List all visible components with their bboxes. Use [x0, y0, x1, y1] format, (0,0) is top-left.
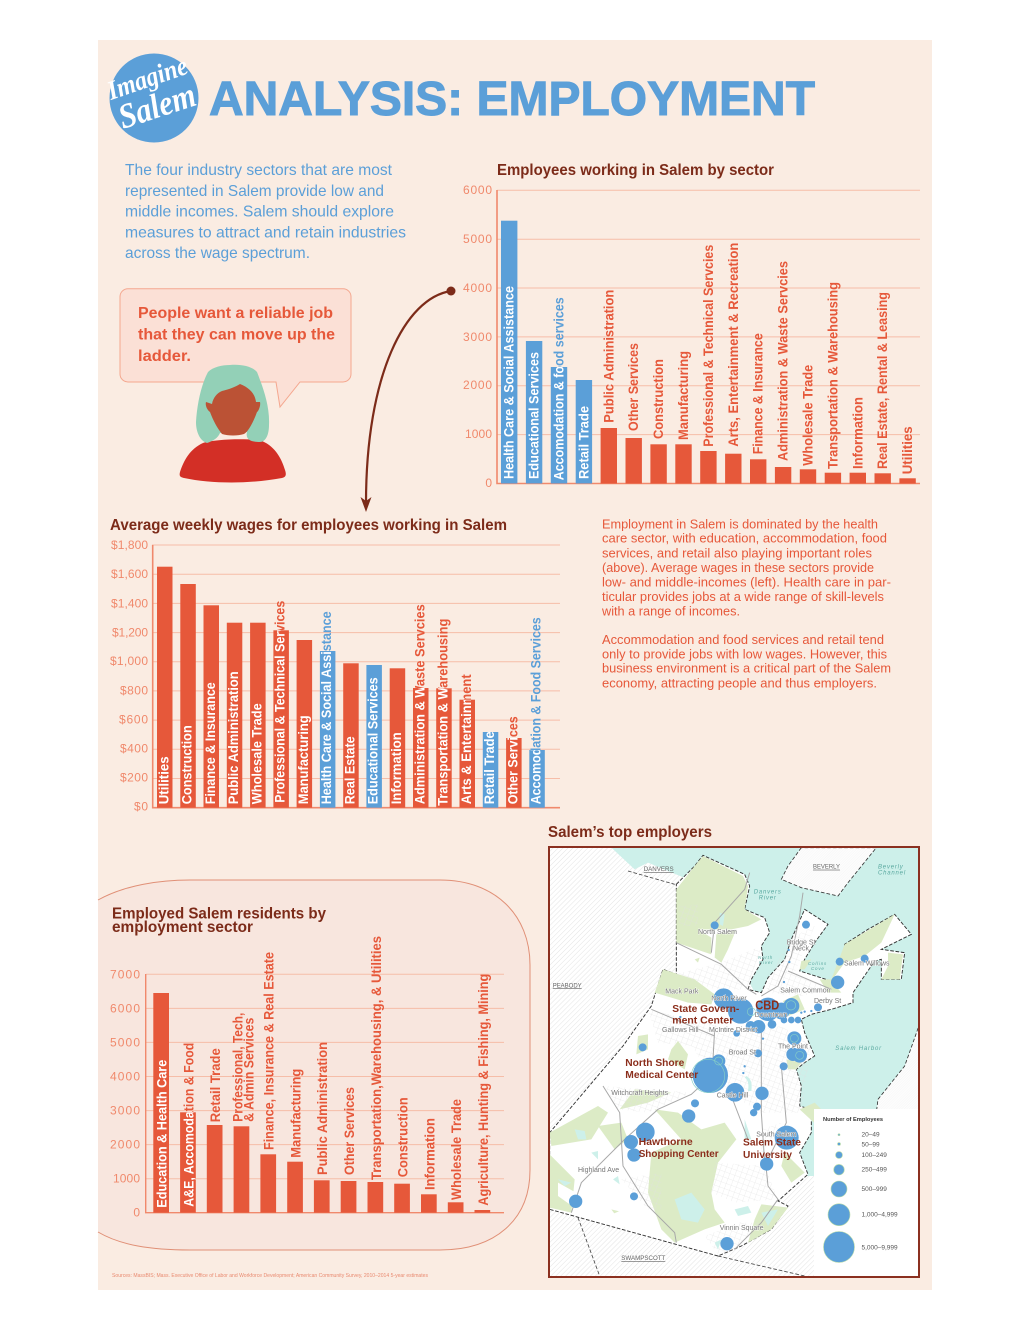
icon: person: [180, 365, 286, 482]
bar chart: employees working in Salem: Finance & Insurance: [751, 333, 766, 454]
bar chart: employees working in Salem: Administration & Waste Servcies: [776, 261, 791, 461]
heading: average weekly wages: Average weekly wages for employees working in Salem: [110, 517, 507, 534]
panel outline: [98, 880, 530, 1250]
callout: speech bubble: [120, 289, 351, 407]
map: top employers: North: [758, 955, 773, 960]
bar chart: employees working in Salem: Arts, Entertainment & Recreation: [726, 243, 741, 447]
map: street grid: [605, 904, 831, 1254]
map: top employers: River: [759, 960, 774, 965]
heading: employed residents: employment sector: [112, 919, 253, 936]
map: top employers: [549, 846, 920, 1278]
map: legend: 1,000–4,999: [862, 1212, 898, 1218]
bar chart: employees working in Salem: 6000: [463, 183, 492, 197]
bar chart: employees working in Salem: Real Estate, Rental & Leasing: [875, 292, 890, 469]
bar chart: average weekly wages: Arts & Entertainment: [459, 674, 474, 804]
map: Beverly and Marblehead land: [781, 848, 920, 1113]
bar chart: average weekly wages: Arts & Entertainment: [459, 674, 474, 804]
map: bubble rings: [691, 1001, 804, 1093]
bar chart: average weekly wages: $1,600: [111, 567, 148, 581]
bar chart: average weekly wages: Public Administration: [226, 671, 241, 804]
map: top employers: Danvers: [754, 889, 782, 895]
bar chart: employees working in Salem: 4000: [463, 281, 492, 295]
heading: top employers: Salem’s top employers: [548, 824, 712, 841]
analysis text: services, and retail also playing important roles: [602, 546, 872, 560]
map: place names: North Salem: [698, 929, 737, 936]
bar chart: employees working in Salem: 5000: [463, 232, 492, 246]
analysis text: Accommodation and food services and retail tend: [602, 633, 884, 647]
bar chart: employed residents: 1000: [113, 1172, 140, 1186]
analysis text: business environment is a critical part of the Salem: [602, 662, 891, 676]
bar chart: average weekly wages: Administration & Waste Servcies: [412, 604, 427, 804]
map: water: [611, 846, 920, 1176]
analysis text: with a range of incomes.: [601, 604, 740, 618]
map: legend: Number of Employees: [823, 1117, 883, 1123]
bar chart: employed residents: 5000: [110, 1036, 140, 1050]
bar chart: employed residents: Professional, Tech,: [230, 1013, 245, 1122]
callout: speech bubble: ladder.: [138, 348, 191, 365]
bar chart: average weekly wages: [110, 538, 560, 814]
bar chart: employees working in Salem: Wholesale Trade: [800, 364, 816, 466]
background panel: [98, 40, 932, 1290]
map: Salem land: [550, 855, 911, 1256]
map: legend: 250–499: [862, 1166, 887, 1174]
bar chart: average weekly wages: Professional & Technical Services: [273, 601, 288, 803]
bar chart: average weekly wages: $1,000: [110, 654, 148, 668]
bar chart: average weekly wages: $1,400: [111, 596, 148, 610]
bar chart: employees working in Salem: Information: [850, 397, 865, 469]
bar chart: average weekly wages: Manufacturing: [296, 715, 311, 804]
title: ANALYSIS: EMPLOYMENT: [209, 73, 815, 126]
map: top employers: Channel: [878, 870, 906, 876]
bar chart: employed residents: A&E, Accomodation & Food: [181, 1043, 196, 1207]
map: top employers: Salem Harbor: [835, 1046, 882, 1052]
map: place names: Castle Hill: [717, 1093, 749, 1100]
map: legend: 5,000–9,999: [862, 1244, 898, 1252]
bar chart: employed residents: Finance, Insurance & Real Estate: [262, 952, 277, 1150]
map: place names: Broad St: [729, 1050, 756, 1057]
map: place names: North River: [711, 995, 747, 1002]
heading: employed residents: [112, 905, 326, 936]
logo: Imagine Salem: Imagine: [102, 50, 191, 106]
analysis text: care sector, with education, accommodation, food: [602, 532, 887, 546]
bar chart: employed residents: 3000: [110, 1104, 140, 1118]
bar chart: employed residents: & Admin Services: [241, 1018, 256, 1122]
panel: employed residents: [98, 880, 530, 1250]
bar chart: employed residents: Agriculture, Hunting & Fishing, Mining: [476, 974, 491, 1206]
map: place names: Derby St: [814, 998, 841, 1005]
analysis text: (above). Average wages in these sectors provide: [602, 561, 874, 575]
bar chart: average weekly wages: Health Care & Social Assistance: [319, 611, 334, 804]
callout: speech bubble: People want a reliable job: [138, 305, 333, 322]
analysis text: ticular provides jobs at a wide range of skill-levels: [602, 590, 884, 604]
map: employer names: University: [743, 1150, 792, 1161]
bar chart: average weekly wages: $1,800: [111, 538, 148, 552]
intro text: [125, 162, 406, 262]
map: top employers: DANVERS: [644, 866, 674, 873]
bar chart: average weekly wages: Health Care & Social Assistance: [319, 611, 334, 804]
intro text: across the wage spectrum.: [125, 245, 310, 262]
map: place names: McIntire District: [709, 1027, 757, 1034]
map: place names: Neck: [793, 946, 809, 953]
bar chart: average weekly wages: Accomodation & Food Services: [529, 617, 544, 804]
map: employer names: Medical Center: [625, 1070, 698, 1081]
bar chart: employees working in Salem: Health Care & Social Assistance: [502, 286, 517, 479]
bar chart: employed residents: A&E, Accomodation & Food: [181, 1043, 196, 1207]
source note: Sources: MassBIS; Mass. Executive Office of Labor and Workforce Development; American Community Survey, 2010–2014 5-year estimates: [112, 1273, 428, 1279]
map: place names: Witchcraft Heights: [611, 1090, 669, 1097]
bar chart: employed residents: 6000: [110, 1002, 140, 1016]
intro text: represented in Salem provide low and: [125, 183, 384, 200]
map: employer names: CBD: [755, 997, 779, 1012]
bar chart: employees working in Salem: 0: [485, 476, 492, 490]
map: parks: [550, 856, 903, 1243]
map: employer bubbles: [569, 921, 869, 1250]
heading: employees by sector: Employees working in Salem by sector: [497, 162, 774, 179]
bar chart: employed residents: Information: [422, 1118, 437, 1190]
heading: employed residents: Employed Salem residents by: [112, 905, 326, 922]
bar chart: average weekly wages: $400: [120, 742, 148, 756]
bar chart: employed residents: Public Administration: [315, 1042, 330, 1175]
bar chart: average weekly wages: Transportation & Warehousing: [436, 619, 450, 806]
map: top employers: PEABODY: [553, 982, 582, 989]
bar chart: employed residents: Transportation,Warehousing, & Utilities: [369, 936, 384, 1180]
callout: speech bubble: that they can move up the: [138, 326, 335, 344]
analysis text: Employment in Salem is dominated by the health: [602, 517, 878, 531]
bar chart: employed residents: Manufacturing: [288, 1069, 304, 1158]
map: top employers: Cove: [811, 966, 825, 971]
bar chart: average weekly wages: $1,200: [112, 626, 148, 640]
map: legend: 100–249: [862, 1152, 887, 1159]
bar chart: average weekly wages: Utilities: [156, 756, 171, 804]
bar chart: employees working in Salem: Educational Services: [527, 352, 542, 479]
map: place names: Vinnin Square: [720, 1225, 764, 1232]
map: ponds: [558, 913, 778, 1249]
map: place names: Bridge St: [787, 940, 816, 947]
bar chart: employees working in Salem: Accomodation & food services: [552, 297, 566, 480]
bar chart: average weekly wages: Wholesale Trade: [249, 703, 264, 804]
map: employer names: Salem State: [743, 1138, 801, 1149]
bar chart: employees working in Salem: [463, 183, 920, 490]
bar chart: average weekly wages: Accomodation & Food Services: [529, 617, 544, 804]
map: frame: [549, 847, 919, 1277]
map: legend: 500–999: [862, 1186, 887, 1193]
bar chart: employees working in Salem: Utilities: [900, 426, 915, 474]
bar chart: employed residents: Wholesale Trade: [449, 1099, 464, 1200]
map: place names: Downtown: [755, 1012, 787, 1019]
bar chart: average weekly wages: $800: [120, 684, 148, 698]
logo: Imagine Salem: Salem: [113, 75, 201, 137]
map: outer town lines: [578, 871, 805, 1276]
bar chart: average weekly wages: Transportation & Warehousing: [436, 619, 450, 806]
bar chart: employed residents: 2000: [110, 1138, 140, 1152]
intro text: The four industry sectors that are most: [125, 162, 393, 179]
map: legend: 50–99: [862, 1142, 880, 1148]
map: employer names: State Govern-: [672, 1004, 739, 1015]
map: employer names: North Shore: [625, 1058, 685, 1069]
bar chart: employees working in Salem: 3000: [463, 330, 492, 344]
bar chart: employees working in Salem: Public Administration: [601, 290, 616, 423]
bar chart: average weekly wages: Finance & Insurance: [203, 682, 218, 804]
intro text: middle incomes. Salem should explore: [125, 204, 394, 221]
bar chart: average weekly wages: Construction: [180, 725, 195, 804]
bar chart: employees working in Salem: Transportation & Warehousing: [825, 282, 840, 469]
map: top employers: Collins: [808, 961, 827, 966]
bar chart: employed residents: 0: [133, 1206, 140, 1220]
bar chart: average weekly wages: Administration & Waste Servcies: [412, 604, 427, 804]
map: main roads: [571, 873, 831, 1249]
bar chart: average weekly wages: Other Services: [505, 716, 520, 804]
map: place names: Gallows Hill: [662, 1027, 699, 1034]
map: place names: The Point: [778, 1044, 808, 1051]
map: place names: Mack Park: [665, 989, 699, 996]
logo: Imagine Salem: [102, 50, 201, 143]
map: top employers: Beverly: [878, 864, 904, 870]
bar chart: employed residents: Construction: [396, 1097, 410, 1177]
bar chart: employed residents: Retail Trade: [208, 1048, 223, 1122]
bar chart: employed residents: Education & Health Care: [155, 1059, 170, 1208]
bar chart: employees working in Salem: Other Services: [626, 343, 641, 431]
bar chart: average weekly wages: $600: [119, 712, 148, 726]
analysis text: economy, attracting people and thus employers.: [602, 676, 877, 690]
bar chart: average weekly wages: $200: [120, 770, 148, 784]
map: employer names: [625, 997, 801, 1161]
map: top employers: BEVERLY: [813, 864, 841, 871]
map: legend: [814, 1109, 919, 1278]
map: place names: Salem Willows: [844, 960, 890, 967]
arrow: [360, 286, 456, 512]
map: employer names: ment Center: [672, 1016, 733, 1027]
bar chart: average weekly wages: Retail Trade: [482, 731, 497, 804]
bar chart: average weekly wages: $0: [134, 800, 148, 814]
map: place names: Highland Ave: [578, 1167, 619, 1174]
bar chart: employed residents: 7000: [110, 968, 140, 982]
map: top employers: SWAMPSCOTT: [621, 1255, 665, 1262]
map: white open land: [558, 1182, 638, 1228]
bar chart: employees working in Salem: 1000: [465, 427, 492, 441]
map: employer names: Hawthorne: [639, 1137, 693, 1148]
bar chart: average weekly wages: Other Services: [505, 716, 520, 804]
map: employer names: Shopping Center: [639, 1149, 719, 1160]
bar chart: average weekly wages: Professional & Technical Services: [273, 601, 288, 803]
bar chart: employees working in Salem: 2000: [463, 378, 492, 392]
bar chart: employees working in Salem: Construction: [651, 359, 666, 439]
bar chart: employees working in Salem: Professional & Technical Servcies: [701, 245, 716, 447]
bar chart: employed residents: 4000: [110, 1070, 140, 1084]
map: place names: South Salem: [756, 1131, 797, 1138]
map: legend: 20–49: [862, 1132, 880, 1138]
bar chart: average weekly wages: Educational Services: [366, 677, 381, 804]
map: top employers: River: [759, 895, 777, 901]
bar chart: employees working in Salem: Manufacturing: [676, 351, 691, 440]
map: place names: Salem Common: [780, 988, 831, 995]
bar chart: employed residents: [110, 936, 504, 1220]
intro text: measures to attract and retain industries: [125, 224, 406, 242]
analysis text: [601, 517, 891, 690]
bar chart: average weekly wages: Information: [389, 732, 404, 804]
bar chart: employees working in Salem: Accomodation & food services: [552, 297, 566, 480]
bar chart: employees working in Salem: Retail Trade: [576, 406, 591, 479]
analysis text: only to provide jobs with low wages. However, this: [602, 647, 887, 661]
bar chart: employed residents: Other Services: [342, 1087, 357, 1175]
map: place names: [578, 929, 890, 1232]
bar chart: average weekly wages: Real Estate: [342, 736, 358, 804]
analysis text: low- and middle-incomes (left). Health care in par-: [602, 575, 891, 589]
